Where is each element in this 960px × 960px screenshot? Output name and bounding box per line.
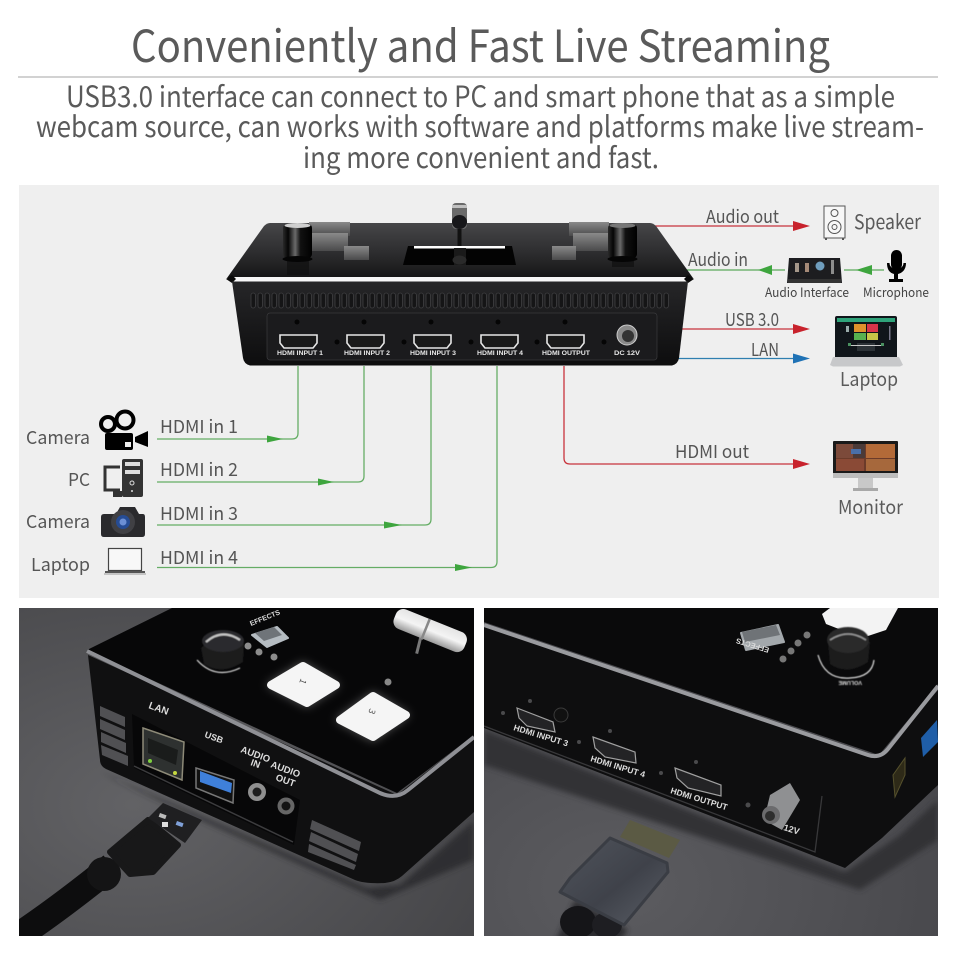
subtitle text block: ing more convenient and fast. <box>303 135 659 177</box>
lan port: LAN <box>147 700 170 718</box>
cast shadow <box>484 730 938 890</box>
gutter between photos <box>474 608 484 936</box>
label: usb 3.0: USB 3.0 <box>725 306 779 332</box>
arrow: hdmi in 2 <box>157 366 364 486</box>
panel: connection diagram <box>19 185 939 598</box>
white button 3 <box>335 692 410 741</box>
label: hdmi out: HDMI out <box>675 438 749 464</box>
port: hdmi input 2 <box>344 320 390 357</box>
white button 1 <box>266 662 340 707</box>
hdmi input 4 port <box>589 737 647 780</box>
device: video switcher <box>226 203 694 366</box>
label: audio in: Audio in <box>688 246 748 272</box>
device front body <box>232 282 688 366</box>
white button 3: 3 <box>365 707 379 716</box>
white button 1: 1 <box>296 677 310 686</box>
arrow: audio in <box>686 265 884 275</box>
side ports <box>893 720 938 797</box>
hdmi output port <box>669 768 730 812</box>
device top plate <box>227 223 693 278</box>
icon: photo camera <box>101 507 145 537</box>
hdmi input 3 port <box>512 708 570 749</box>
left knob <box>282 223 312 275</box>
port: dc 12v <box>614 325 641 357</box>
port panel outline <box>484 726 822 852</box>
audio out jack: AUDIO <box>269 759 302 780</box>
port: dc 12v: DC 12V <box>614 350 641 357</box>
arrow: lan <box>677 354 810 364</box>
label: pc: PC <box>68 466 90 492</box>
icon: laptop outline <box>104 548 146 575</box>
usb port: USB <box>203 729 225 746</box>
audio out jack <box>270 762 300 814</box>
label: hdmi in 4: HDMI in 4 <box>160 544 238 570</box>
hdmi input 3 port: HDMI INPUT 3 <box>512 722 570 749</box>
label: camera 2: Camera <box>26 508 90 534</box>
indicator dots <box>244 642 278 660</box>
icon: speaker <box>824 206 845 240</box>
dc 12v connector: 12V <box>782 822 801 837</box>
rear port panel <box>132 714 300 845</box>
icon: microphone <box>887 250 906 282</box>
audio in jack: AUDIO <box>239 744 272 765</box>
fader handle <box>384 607 469 686</box>
port: hdmi input 3: HDMI INPUT 3 <box>410 350 456 357</box>
dc 12v connector <box>762 783 801 837</box>
fader window <box>403 246 516 265</box>
audio in jack <box>240 746 270 801</box>
title rule <box>18 76 938 78</box>
usb plug and cable <box>12 803 202 940</box>
silver edge <box>227 277 693 282</box>
icon: video camera <box>101 412 148 450</box>
label: camera 1: Camera <box>26 424 90 450</box>
label: hdmi in 1: HDMI in 1 <box>160 413 238 439</box>
icon: audio interface <box>787 258 842 283</box>
label: hdmi in 3: HDMI in 3 <box>160 500 238 526</box>
left buttons <box>309 222 369 260</box>
label: lan: LAN <box>751 336 779 362</box>
lan port <box>143 700 184 780</box>
hdmi plug <box>556 820 680 940</box>
panel indicator dots <box>334 340 606 344</box>
indicator dots <box>780 632 810 662</box>
icon: monitor <box>833 441 898 491</box>
label: laptop: Laptop <box>840 365 898 392</box>
audio in jack: IN <box>249 757 262 771</box>
arrow: hdmi in 4 <box>157 366 497 571</box>
label: microphone: Microphone <box>863 282 929 301</box>
subtitle text block <box>36 74 924 177</box>
label: audio interface: Audio Interface <box>765 282 849 301</box>
arrow: hdmi in 1 <box>157 366 298 442</box>
title: Conveniently and Fast Live Streaming <box>131 11 830 75</box>
silver edge <box>87 651 474 796</box>
port: hdmi input 3 <box>410 320 456 357</box>
label: laptop left: Laptop <box>31 551 90 577</box>
label: monitor: Monitor <box>838 493 904 520</box>
port: hdmi output: HDMI OUTPUT <box>542 350 590 357</box>
port: hdmi input 1 <box>277 320 323 357</box>
port: hdmi input 2: HDMI INPUT 2 <box>344 350 390 357</box>
vent slots <box>250 292 670 309</box>
device body <box>88 655 474 883</box>
white key <box>822 608 898 638</box>
effects label and button <box>735 625 784 655</box>
cast shadow <box>129 785 474 901</box>
label: audio out: Audio out <box>706 203 779 229</box>
device top <box>484 608 938 755</box>
arrow: hdmi out <box>564 366 810 469</box>
silver edge <box>484 625 938 756</box>
label: speaker: Speaker <box>854 206 921 235</box>
audio out jack: OUT <box>274 772 297 790</box>
side vents left <box>100 706 128 766</box>
device body <box>484 625 938 868</box>
port: hdmi output <box>542 320 590 357</box>
connection lines and arrows <box>157 221 884 571</box>
effects button <box>249 609 288 647</box>
volume knob: VOLUME <box>838 679 862 685</box>
port: hdmi input 4: HDMI INPUT 4 <box>477 350 523 357</box>
corner caps <box>226 275 694 283</box>
icon: laptop with switcher app <box>830 316 903 366</box>
label: hdmi in 2: HDMI in 2 <box>160 456 238 482</box>
right knob <box>608 223 638 267</box>
effects button: EFFECTS <box>249 609 282 628</box>
port panel <box>267 313 657 360</box>
photo: switcher rear with usb plug <box>12 607 474 940</box>
photo: switcher front with hdmi plug <box>484 608 938 940</box>
arrow: usb 3.0 <box>682 324 810 334</box>
port: hdmi input 4 <box>477 320 523 357</box>
usb port <box>196 729 234 803</box>
volume knob <box>818 627 874 685</box>
effects label and button: EFFECTS <box>735 636 770 655</box>
device top <box>87 608 474 793</box>
icon: desktop pc <box>105 459 143 497</box>
hdmi output port: HDMI OUTPUT <box>669 785 730 812</box>
arrow: audio out <box>640 221 810 231</box>
port: hdmi input 1: HDMI INPUT 1 <box>277 350 323 357</box>
fader handle <box>452 203 467 246</box>
side vents right <box>308 820 361 870</box>
arrow: hdmi in 3 <box>157 366 431 528</box>
knob <box>197 630 244 672</box>
port indicator dots <box>501 699 750 808</box>
hdmi input 4 port: HDMI INPUT 4 <box>589 753 647 780</box>
right buttons <box>552 222 609 260</box>
